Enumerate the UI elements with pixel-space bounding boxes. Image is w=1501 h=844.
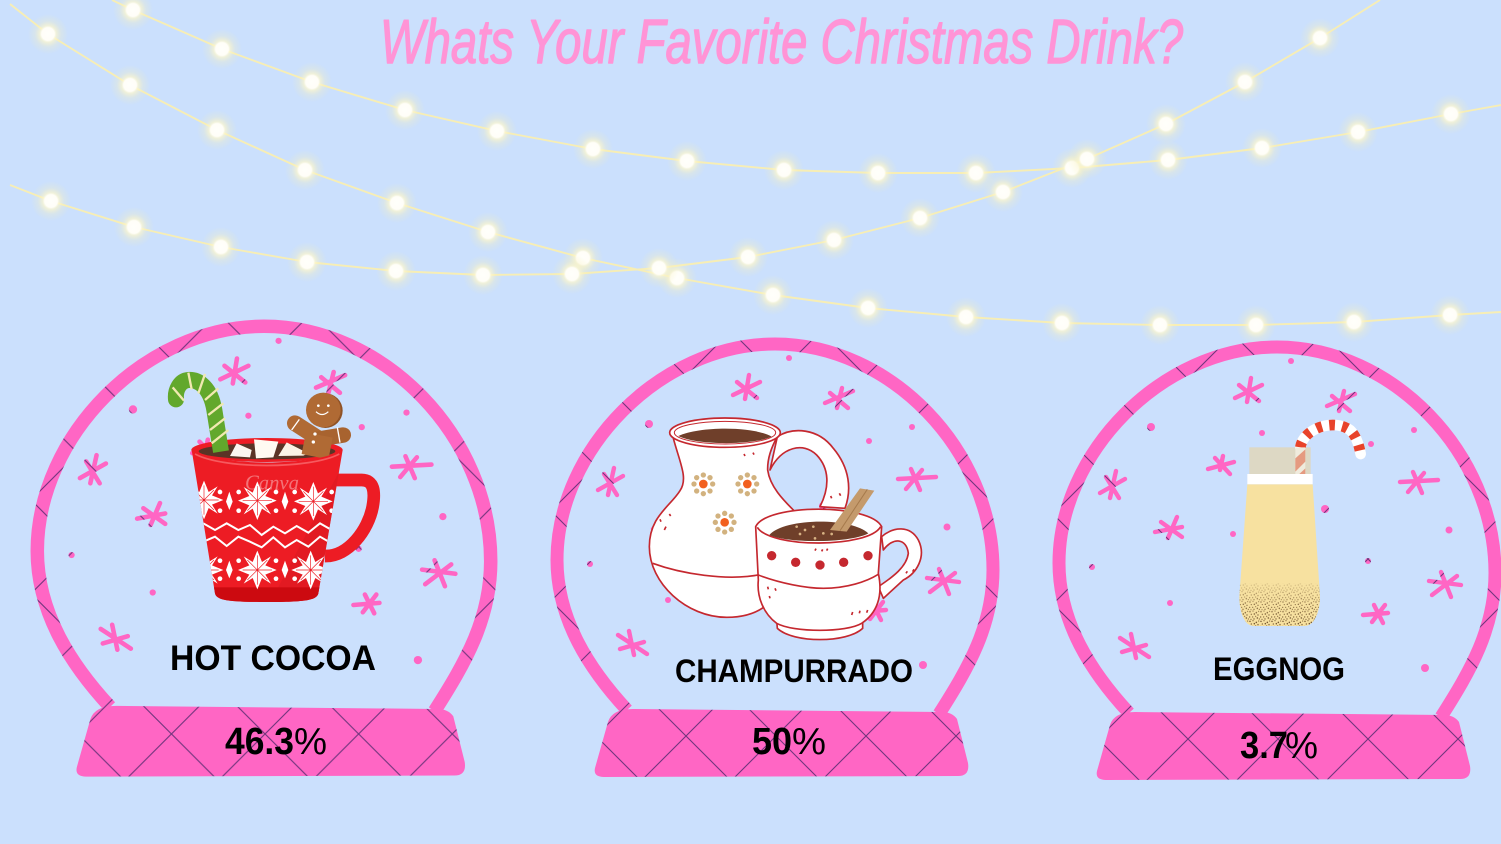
icon: eggnog glass with candy straw xyxy=(1239,425,1361,626)
icon: hot cocoa mug: Canva xyxy=(245,472,299,494)
label: hot cocoa: HOT COCOA xyxy=(170,639,376,678)
value: 3.7%: % xyxy=(1285,725,1318,767)
icon: hot cocoa mug xyxy=(168,373,374,604)
snow globe: eggnog xyxy=(1059,347,1495,780)
string lights xyxy=(10,0,1501,345)
value: 46.3%: % xyxy=(294,721,327,763)
panel: hot cocoa xyxy=(37,326,491,777)
snow globe: hot cocoa xyxy=(37,326,491,777)
snow globe: champurrado xyxy=(557,344,993,777)
icon: champurrado jug and cup xyxy=(649,418,921,640)
label: champurrado: CHAMPURRADO xyxy=(675,653,913,689)
label: eggnog: EGGNOG xyxy=(1213,651,1345,687)
value: 3.7%: 3.7 xyxy=(1240,725,1288,767)
value: 50% xyxy=(752,721,826,763)
value: 50%: % xyxy=(792,721,826,763)
value: 3.7% xyxy=(1240,725,1318,767)
value: 46.3%: 46.3 xyxy=(225,721,294,763)
panel: eggnog xyxy=(1059,347,1495,780)
title: Whats Your Favorite Christmas Drink? xyxy=(380,8,1183,77)
value: 50%: 50 xyxy=(752,721,792,763)
panel: champurrado xyxy=(557,344,993,777)
